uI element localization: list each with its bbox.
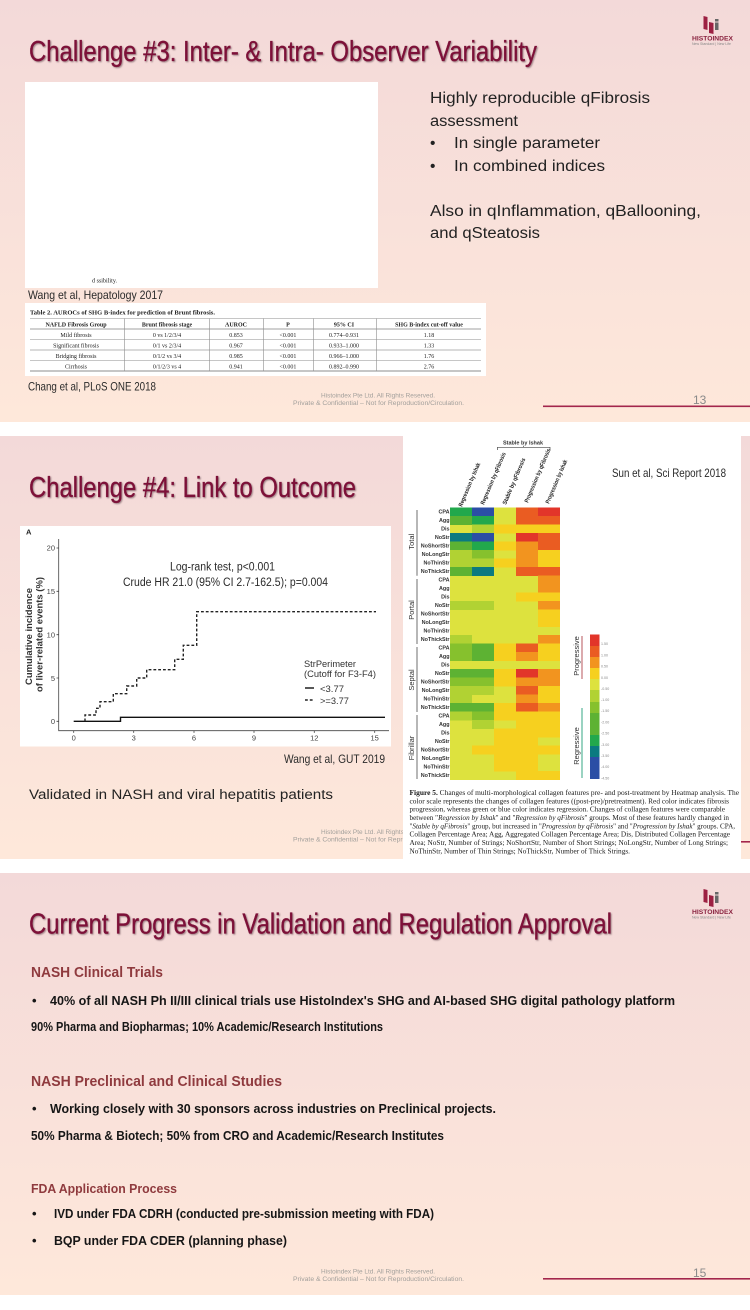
text block: qFibrosis reproducibility: In combined indices (454, 158, 605, 175)
table: AUROCs of SHG B-index: 0/1/2/3 vs 4 (153, 364, 181, 370)
text block: qFibrosis reproducibility: • (430, 158, 435, 175)
color scale legend: Regressive (572, 727, 581, 765)
footer: slide 13: Private & Confidential – Not for Reproduction/Circulation. (293, 400, 464, 407)
logo: HistoIndex: HISTOINDEX (692, 36, 734, 42)
line chart: cumulative incidence of liver-related events: 3 (132, 734, 136, 742)
logo: HistoIndex (692, 889, 734, 920)
row labels: NoStr (435, 671, 450, 677)
row labels: NoStr (435, 739, 450, 745)
column headers (458, 448, 569, 508)
line chart: cumulative incidence of liver-related events: Follow-up duration (years) (167, 746, 290, 754)
figure caption: between "Regression by Ishak" and "Regression by qFibrosis" groups. Most of these features hardly changed in (410, 813, 729, 822)
line chart: cumulative incidence of liver-related events: (Cutoff for F3-F4) (304, 669, 376, 679)
figure panel: heatmap of collagen features (403, 436, 741, 859)
table: AUROCs of SHG B-index: Significant fibrosis (53, 342, 100, 350)
row labels: Agg (439, 518, 450, 524)
citation: Wang GUT: Wang et al, GUT 2019 (284, 752, 385, 766)
section: NASH preclinical and clinical studies: • (32, 1101, 37, 1116)
color scale legend: -2.50 (601, 732, 609, 736)
table: AUROCs of SHG B-index: 0.853 (229, 333, 243, 339)
table: AUROCs of SHG B-index: <0.001 (280, 354, 296, 360)
section: FDA application process: IVD under FDA CDRH (conducted pre-submission meeting with FDA) (54, 1206, 434, 1221)
section: FDA application process: BQP under FDA CDER (planning phase) (54, 1233, 287, 1248)
table: AUROCs of SHG B-index: 0.966–1.000 (329, 354, 359, 360)
color scale legend: Progressive (572, 636, 581, 676)
line chart: cumulative incidence of liver-related events: Crude HR 21.0 (95% CI 2.7-162.5); p=0.004 (123, 577, 329, 589)
image panel: blank reproducibility figure (25, 82, 378, 288)
table: AUROCs of SHG B-index: 0 vs 1/2/3/4 (153, 333, 181, 339)
color scale legend: 0.50 (601, 665, 608, 669)
title: challenge 4: Challenge #4: Link to Outcome (29, 472, 356, 504)
table: AUROCs of SHG B-index: <0.001 (280, 344, 296, 350)
color scale legend: 1.00 (601, 653, 608, 657)
line chart: cumulative incidence of liver-related events: 0 (72, 734, 76, 742)
line chart: cumulative incidence of liver-related events: 5 (51, 674, 55, 683)
row labels: NoThickStr (421, 705, 450, 711)
figure caption: Collagen Percentage Area; Agg, Aggregated Collagen Percentage Area; Dis, Distributed Collagen Percentage (410, 830, 731, 839)
color scale legend: 0.00 (601, 676, 608, 680)
row labels: CPA (439, 714, 450, 720)
panel: slide 13 inter and intra observer variability (0, 0, 750, 422)
text block: qFibrosis reproducibility: assessment (430, 113, 519, 130)
footer: slide 14: Histoindex Pte Ltd. All Rights Reserved. (321, 829, 435, 836)
column headers: Regression by Ishak (458, 462, 482, 508)
row labels: Dis (441, 663, 450, 669)
section: NASH preclinical and clinical studies: Working closely with 30 sponsors across industries on Preclinical projects. (50, 1101, 496, 1116)
text block: validation note: Validated in NASH and viral hepatitis patients (29, 787, 333, 803)
color scale legend: -3.00 (601, 743, 609, 747)
table: AUROCs of SHG B-index: SHG B-index cut-off value (395, 322, 463, 328)
section: FDA application process: FDA Application Process (31, 1181, 177, 1196)
line chart: cumulative incidence of liver-related events: 12 (310, 734, 318, 742)
citation: Wang Hepatology: Wang et al, Hepatology 2017 (28, 288, 163, 302)
footer: slide 15: Histoindex Pte Ltd. All Rights Reserved. (321, 1268, 435, 1276)
title: current progress: Current Progress in Validation and Regulation Approval (29, 908, 612, 940)
citation: Sun Sci Report: Sun et al, Sci Report 2018 (612, 466, 726, 480)
heatmap grid (450, 508, 560, 780)
table: AUROCs of SHG B-index: 0/1 vs 2/3/4 (153, 344, 181, 350)
line chart: cumulative incidence of liver-related events: 0 (51, 717, 55, 726)
section: FDA application process: • (32, 1233, 37, 1248)
text block: qFibrosis reproducibility (430, 90, 701, 242)
row labels: NoThinStr (423, 765, 450, 771)
section: NASH clinical trials: NASH Clinical Trials (31, 965, 163, 981)
color scale legend: -4.50 (601, 776, 609, 780)
table: AUROCs of SHG B-index: <0.001 (280, 364, 296, 370)
section: NASH preclinical and clinical studies: 50% Pharma & Biotech; 50% from CRO and Academic/Research Institutes (31, 1128, 444, 1143)
table: AUROCs of SHG B-index: Mild fibrosis (60, 332, 92, 339)
bracket: stable by Ishak: Stable by Ishak (503, 441, 544, 447)
table: AUROCs of SHG B-index: 2.76 (424, 364, 434, 370)
figure caption: "Stable by qFibrosis" group, but increased in "Progression by qFibrosis" and "Progression by Ishak" groups. CPA, (410, 821, 735, 830)
row labels: NoLongStr (422, 620, 450, 626)
title: challenge 3: Challenge #3: Inter- & Intra- Observer Variability (29, 36, 538, 68)
footer: slide 13: Histoindex Pte Ltd. All Rights Reserved. (321, 392, 435, 400)
section: NASH preclinical and clinical studies (31, 1074, 496, 1143)
footer: slide 15 (293, 1266, 750, 1283)
row labels: CPA (439, 578, 450, 584)
line chart: cumulative incidence of liver-related events: Cumulative incidence (24, 588, 34, 685)
row labels: CPA (439, 646, 450, 652)
line chart: cumulative incidence of liver-related events (20, 526, 391, 754)
line chart: cumulative incidence of liver-related events: 20 (47, 544, 55, 552)
color scale legend: -1.00 (601, 698, 609, 702)
table: AUROCs of SHG B-index: 0.933–1.000 (329, 344, 359, 350)
table: AUROCs of SHG B-index (25, 303, 486, 376)
line chart: cumulative incidence of liver-related events: <3.77 (320, 684, 344, 694)
row labels: Dis (441, 527, 450, 533)
table: AUROCs of SHG B-index: 0.941 (229, 364, 243, 370)
table: AUROCs of SHG B-index: 0.774–0.931 (329, 333, 359, 339)
logo: HistoIndex (692, 16, 734, 46)
table: AUROCs of SHG B-index: 1.33 (424, 344, 434, 350)
footer: slide 14 (293, 829, 750, 844)
section: FDA application process (31, 1181, 434, 1248)
footer: slide 13 (293, 392, 750, 407)
text block: qFibrosis reproducibility: and qSteatosis (430, 225, 540, 242)
table: AUROCs of SHG B-index: Table 2. AUROCs of SHG B-index for prediction of Brunt fibrosis. (30, 310, 216, 316)
text block: qFibrosis reproducibility: Highly reproducible qFibrosis (430, 90, 650, 107)
table: AUROCs of SHG B-index: NAFLD Fibrosis Group (45, 322, 107, 328)
image panel: blank reproducibility figure: d ssibility. (92, 278, 117, 284)
section: NASH clinical trials: 40% of all NASH Ph II/III clinical trials use HistoIndex's SHG and AI-based SHG digital pathology platform (50, 993, 675, 1008)
table: AUROCs of SHG B-index: 0.967 (229, 344, 243, 350)
section: NASH clinical trials: 90% Pharma and Biopharmas; 10% Academic/Research Institutions (31, 1019, 383, 1034)
row labels (421, 510, 450, 779)
column headers: Stable by qFibrosis (502, 457, 528, 506)
section: NASH clinical trials: • (32, 993, 37, 1008)
text block: qFibrosis reproducibility: Also in qInflammation, qBallooning, (430, 203, 701, 220)
row labels: NoStr (435, 535, 450, 541)
section: NASH preclinical and clinical studies: NASH Preclinical and Clinical Studies (31, 1074, 282, 1090)
row labels: Agg (439, 654, 450, 660)
panel: slide 15 validation and regulation progress (0, 873, 750, 1295)
row labels: NoThickStr (421, 569, 450, 575)
citation: Chang PLoS ONE: Chang et al, PLoS ONE 2018 (28, 380, 156, 394)
row labels: NoShortStr (421, 544, 450, 550)
figure caption: color scale represents the changes of collagen features ((post-pre)/pretreatment). Red color indicates fibrosis (410, 796, 729, 805)
line chart: cumulative incidence of liver-related events: 6 (192, 734, 196, 742)
table: AUROCs of SHG B-index: Bridging fibrosis (56, 353, 97, 360)
footer: slide 13: 13 (693, 393, 707, 407)
table: AUROCs of SHG B-index: Brunt fibrosis stage (142, 322, 192, 328)
row labels: NoThinStr (423, 697, 450, 703)
row labels: Dis (441, 731, 450, 737)
row labels: Agg (439, 586, 450, 592)
figure caption: Figure 5. Changes of multi-morphological collagen features pre- and post-treatment by Heatmap analysis. The (410, 788, 740, 797)
row labels: NoThinStr (423, 629, 450, 635)
row group labels: Fibrillar (407, 735, 416, 760)
row labels: NoThinStr (423, 561, 450, 567)
row labels: CPA (439, 510, 450, 516)
table: AUROCs of SHG B-index: P (286, 322, 290, 328)
table: AUROCs of SHG B-index: <0.001 (280, 333, 296, 339)
color scale legend: -4.00 (601, 765, 609, 769)
logo: HistoIndex: HISTOINDEX (692, 909, 734, 916)
color scale legend: -1.50 (601, 709, 609, 713)
row labels: NoStr (435, 603, 450, 609)
figure caption: NoThinStr, Number of Thin Strings; NoThickStr, Number of Thick Strings. (410, 846, 630, 855)
row labels: NoShortStr (421, 612, 450, 618)
footer: slide 15: Private & Confidential – Not for Reproduction/Circulation. (293, 1276, 464, 1283)
logo: HistoIndex: New Standard | New Life (692, 916, 731, 920)
line chart: cumulative incidence of liver-related events: A (26, 528, 32, 536)
color scale legend: -0.50 (601, 687, 609, 691)
column headers: Regression by qFibrosis (480, 451, 508, 506)
table: AUROCs of SHG B-index: 0/1/2 vs 3/4 (153, 354, 181, 360)
section: NASH clinical trials (31, 965, 675, 1034)
row labels: NoLongStr (422, 688, 450, 694)
column headers: Progression by qFibrosis (524, 448, 553, 504)
table: AUROCs of SHG B-index: 95% CI (334, 322, 355, 328)
row group labels: Septal (407, 669, 416, 691)
footer: slide 14: Private & Confidential – Not for Reproduction/Circulation. (293, 836, 464, 844)
table: AUROCs of SHG B-index: 1.18 (424, 333, 434, 339)
table: AUROCs of SHG B-index: 0.892–0.990 (329, 364, 359, 370)
row labels: NoThickStr (421, 773, 450, 779)
column headers: Progression by Ishak (545, 459, 569, 505)
row labels: NoShortStr (421, 748, 450, 754)
color scale legend: 1.50 (601, 642, 608, 646)
logo: HistoIndex: New Standard | New Life (692, 42, 731, 46)
row group labels: Portal (407, 600, 416, 620)
line chart: cumulative incidence of liver-related events: 15 (47, 587, 55, 596)
line chart: cumulative incidence of liver-related events: 9 (252, 734, 256, 742)
section: FDA application process: • (32, 1206, 37, 1221)
color scale legend: -3.50 (601, 754, 609, 758)
row group labels: Total (407, 533, 416, 550)
line chart: cumulative incidence of liver-related events: >=3.77 (320, 696, 349, 706)
row labels: NoThickStr (421, 637, 450, 643)
text block: qFibrosis reproducibility: In single parameter (454, 135, 600, 152)
line chart: cumulative incidence of liver-related events: Log-rank test, p<0.001 (170, 562, 275, 574)
line chart: cumulative incidence of liver-related events: 15 (371, 734, 379, 742)
row labels: NoShortStr (421, 680, 450, 686)
row labels: NoLongStr (422, 552, 450, 558)
bracket: stable by Ishak (498, 441, 550, 450)
row labels: Dis (441, 595, 450, 601)
row labels: Agg (439, 722, 450, 728)
figure caption: progression, whereas green or blue color indicates regression. Changes of collagen features were comparable (410, 805, 726, 814)
footer: slide 15: 15 (693, 1266, 707, 1280)
table: AUROCs of SHG B-index: 0.985 (229, 354, 243, 360)
line chart: cumulative incidence of liver-related events: 10 (47, 630, 55, 640)
row labels: NoLongStr (422, 756, 450, 762)
text block: qFibrosis reproducibility: • (430, 135, 435, 152)
color scale legend: -2.00 (601, 720, 609, 724)
figure caption (410, 788, 740, 855)
line chart: cumulative incidence of liver-related events: of liver-related events (%) (34, 577, 44, 692)
panel: slide 14 link to outcome (0, 436, 750, 859)
line chart: cumulative incidence of liver-related events: StrPerimeter (304, 659, 356, 669)
table: AUROCs of SHG B-index: AUROC (225, 322, 247, 328)
figure caption: Area; NoStr, Number of Strings; NoShortStr, Number of Short Strings; NoLongStr, Number of Long Strings; (410, 838, 728, 847)
row group labels (407, 510, 417, 779)
table: AUROCs of SHG B-index: Cirrhosis (65, 364, 88, 370)
table: AUROCs of SHG B-index: 1.76 (424, 354, 434, 360)
color scale legend (572, 634, 609, 780)
